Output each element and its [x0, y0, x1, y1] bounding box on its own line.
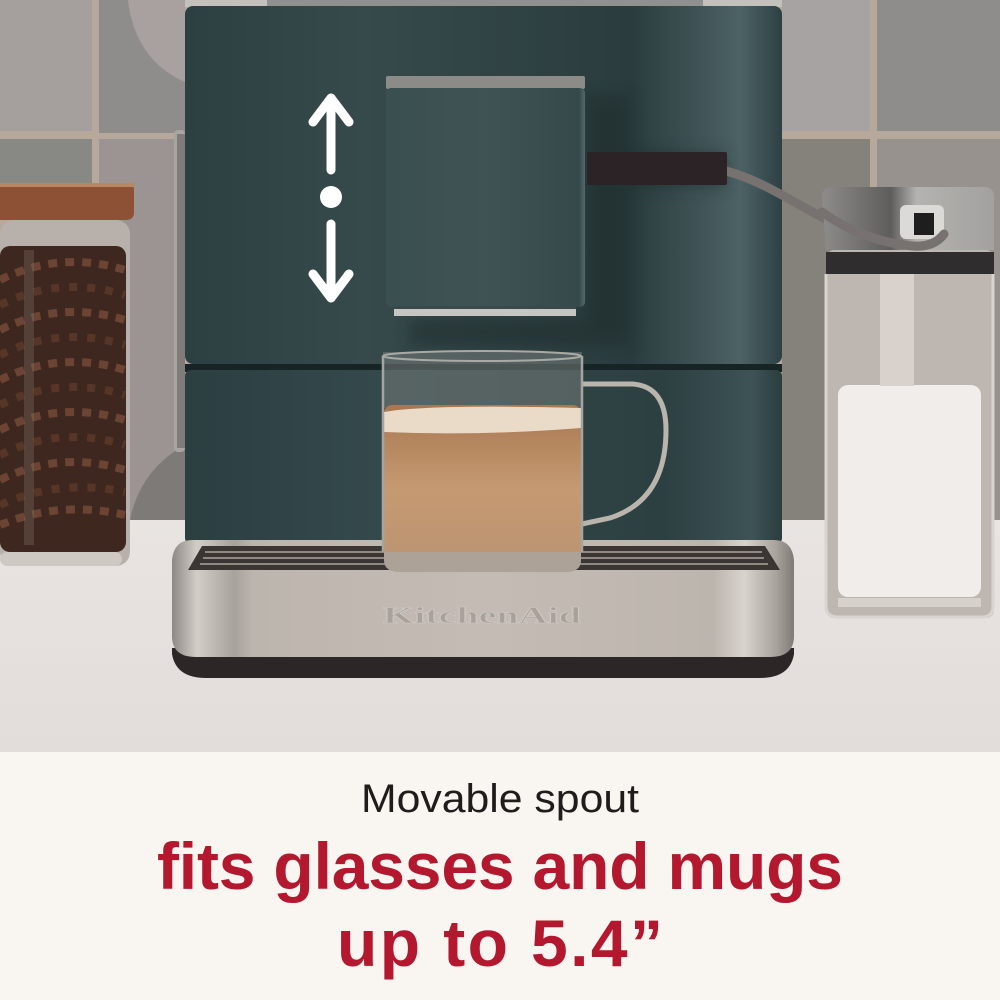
drip tray: [172, 540, 794, 678]
caption panel: [0, 752, 1000, 1000]
brand wordmark: KitchenAid: [383, 603, 581, 628]
spout shadow: [410, 95, 726, 345]
machine side handle: [174, 130, 185, 452]
machine upper body: [185, 0, 782, 364]
glass mug of coffee: [383, 351, 666, 572]
wall tiles: [0, 0, 1000, 525]
caption line: Movable spout: [361, 777, 639, 821]
movable spout: [386, 76, 585, 316]
headline line 2: up to 5.4”: [337, 906, 663, 980]
headline line 1: fits glasses and mugs: [157, 829, 843, 903]
countertop: [0, 520, 1000, 752]
milk carafe: [822, 187, 994, 618]
height arrows icon: [313, 98, 349, 298]
machine lower body: [185, 364, 782, 544]
milk hose: [587, 152, 944, 246]
jar lid: [0, 183, 134, 220]
coffee bean jar: [0, 183, 134, 566]
